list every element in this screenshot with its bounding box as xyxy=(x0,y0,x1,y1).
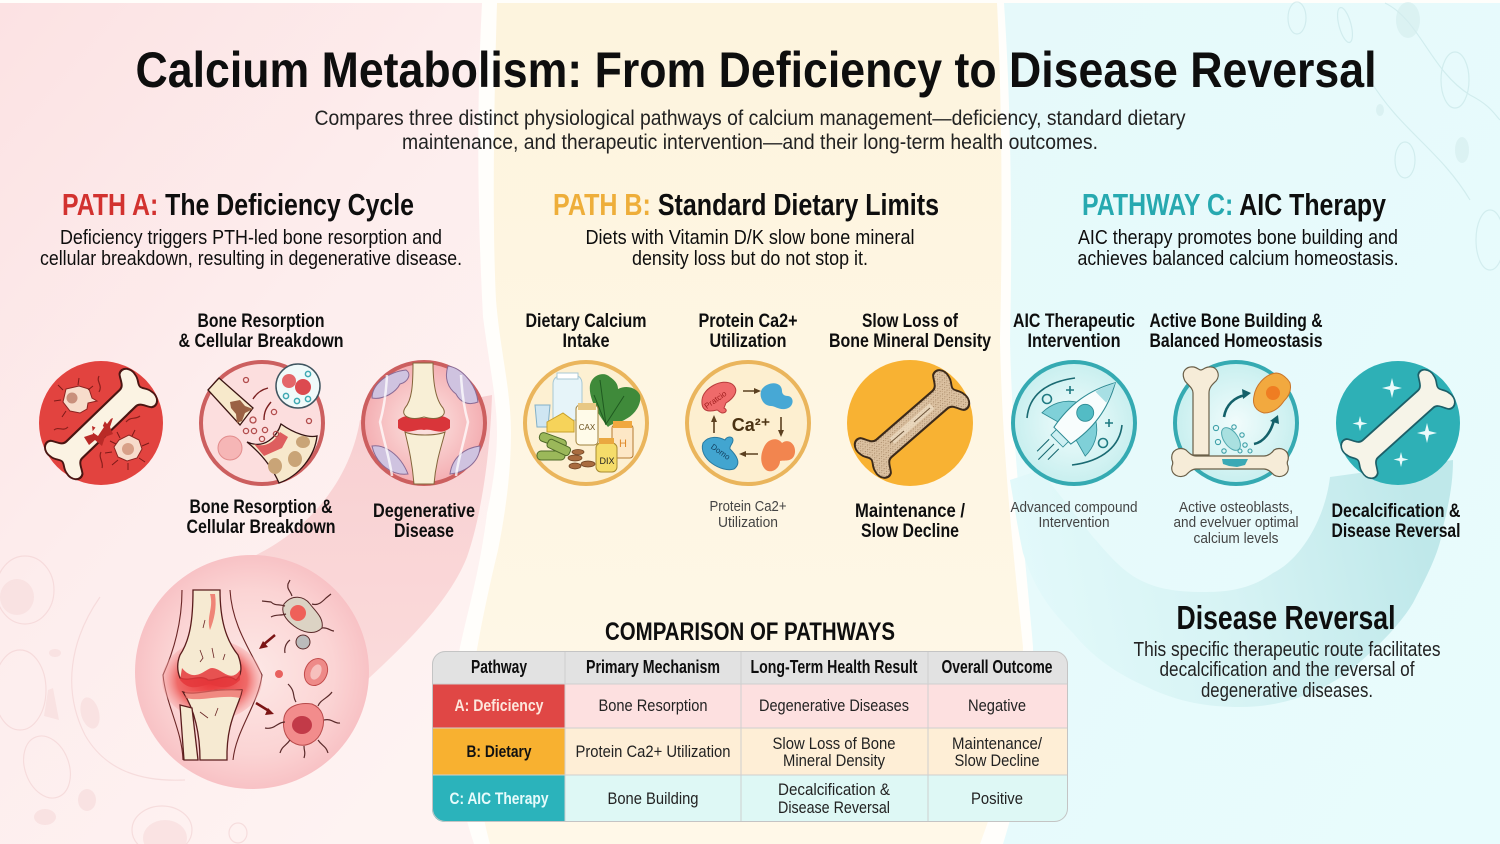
table row C: C: AIC Therapy xyxy=(450,789,549,808)
caption: protein utilization: Protein Ca2+ xyxy=(710,498,787,515)
description: path B: Diets with Vitamin D/K slow bone mineral xyxy=(586,227,914,249)
icon: rocket xyxy=(1013,361,1137,484)
label: active bone building: Balanced Homeostasis xyxy=(1150,330,1323,352)
caption: protein utilization xyxy=(710,498,787,531)
callout: disease reversal: decalcification and the reversal of xyxy=(1160,659,1415,681)
callout: disease reversal xyxy=(1134,599,1440,702)
table header: Long-Term Health Result xyxy=(750,657,918,677)
icon: protein calcium cycle: Pratcio xyxy=(703,389,729,411)
label: dietary calcium intake: Dietary Calcium xyxy=(526,310,646,332)
label: AIC intervention: Intervention xyxy=(1028,330,1120,352)
table row B: B: Dietary xyxy=(466,742,532,761)
label: protein utilization top: Protein Ca2+ xyxy=(698,310,798,332)
icon: bone resorption and cellular breakdown xyxy=(201,362,323,484)
panel: path B xyxy=(525,187,991,542)
icon: dietary calcium foods: H xyxy=(619,438,627,450)
caption: advanced compound xyxy=(1010,499,1138,531)
table row B xyxy=(466,734,1042,770)
label: bone resorption lower: Bone Resorption & xyxy=(190,496,332,518)
label: bone resorption lower xyxy=(186,496,336,538)
label: AIC intervention: AIC Therapeutic xyxy=(1013,310,1135,332)
title: Calcium Metabolism: From Deficiency to Disease Reversal xyxy=(136,42,1376,98)
icon: porous bone xyxy=(847,360,973,486)
table row C: Positive xyxy=(971,789,1023,808)
table row B: Maintenance/ xyxy=(952,734,1042,753)
icon: protein calcium cycle: Domo xyxy=(709,442,732,462)
subtitle: Compares three distinct physiological pathways of calcium management—deficiency, standard dietary xyxy=(314,107,1186,130)
icon: dietary calcium foods: DIX xyxy=(599,456,615,466)
table header: Primary Mechanism xyxy=(586,657,720,677)
subtitle: maintenance, and therapeutic intervention—and their long-term health outcomes. xyxy=(402,131,1098,154)
icon: healthy bone xyxy=(1336,361,1460,485)
caption: advanced compound: Advanced compound xyxy=(1010,499,1138,516)
label: decalcification and reversal: Decalcification & xyxy=(1332,500,1460,522)
label: maintenance slow decline: Maintenance / xyxy=(855,500,965,522)
description: path A: Deficiency triggers PTH-led bone resorption and xyxy=(60,227,442,249)
description: path C: AIC therapy promotes bone building and xyxy=(1078,227,1398,249)
caption: active osteoblasts xyxy=(1174,499,1298,547)
label: maintenance slow decline xyxy=(855,500,965,542)
label: protein utilization top: Utilization xyxy=(710,330,786,352)
description: path B: density loss but do not stop it. xyxy=(632,248,868,270)
table row A: Negative xyxy=(968,696,1026,715)
label: degenerative disease xyxy=(373,500,475,542)
table row A xyxy=(454,696,1026,715)
icon: dietary calcium foods xyxy=(525,362,647,484)
description: path C xyxy=(1078,227,1398,270)
icon: protein calcium cycle: Ca²⁺ xyxy=(732,415,770,435)
comparison table xyxy=(432,651,1068,822)
description: path C: achieves balanced calcium homeostasis. xyxy=(1078,248,1398,270)
panel: path C xyxy=(1010,187,1460,702)
callout: disease reversal: This specific therapeutic route facilitates xyxy=(1134,639,1440,661)
table row C: Decalcification & xyxy=(778,780,891,799)
label: slow loss: Slow Loss of xyxy=(862,310,958,332)
label: dietary calcium intake xyxy=(526,310,646,352)
table row B: Slow Loss of Bone xyxy=(772,734,896,753)
label: slow loss: Bone Mineral Density xyxy=(829,330,991,352)
table row C xyxy=(450,780,1023,817)
table row B: Slow Decline xyxy=(954,751,1040,770)
illustration: inflamed knee and cells xyxy=(135,555,369,789)
caption: active osteoblasts: and evelvuer optimal xyxy=(1174,514,1298,531)
panel: path A xyxy=(39,187,485,789)
swoosh: path C flow band xyxy=(1010,460,1453,707)
heading: path A: PATH A: The Deficiency Cycle xyxy=(62,187,414,222)
caption: protein utilization: Utilization xyxy=(718,514,778,531)
label: bone resorption lower: Cellular Breakdown xyxy=(186,516,336,538)
table row A: Degenerative Diseases xyxy=(759,696,909,715)
caption: active osteoblasts: calcium levels xyxy=(1194,530,1278,547)
caption: advanced compound: Intervention xyxy=(1038,514,1110,531)
subtitle xyxy=(314,107,1186,154)
label: AIC intervention xyxy=(1013,310,1135,352)
icon: dietary calcium foods: CAX xyxy=(579,423,596,432)
label: slow loss xyxy=(829,310,991,352)
table row C: Bone Building xyxy=(608,789,698,808)
icon: degenerative joint xyxy=(363,362,485,484)
label: bone resorption top xyxy=(178,310,344,352)
icon: bone building with osteoblast xyxy=(1172,362,1297,484)
heading: path B: PATH B: Standard Dietary Limits xyxy=(553,187,939,222)
label: bone resorption top: Bone Resorption xyxy=(198,310,324,332)
heading: path C: PATHWAY C: AIC Therapy xyxy=(1082,187,1387,222)
label: maintenance slow decline: Slow Decline xyxy=(861,520,959,542)
heading: comparison of pathways: COMPARISON OF PATHWAYS xyxy=(605,618,895,646)
table header xyxy=(471,657,1052,677)
table header: Overall Outcome xyxy=(942,657,1052,677)
table header: Pathway xyxy=(471,657,527,677)
icon: protein calcium cycle xyxy=(687,362,809,484)
label: bone resorption top: & Cellular Breakdown xyxy=(178,330,344,352)
swoosh: path A flow band xyxy=(250,395,492,720)
label: decalcification and reversal xyxy=(1332,500,1460,542)
label: active bone building: Active Bone Building & xyxy=(1150,310,1322,332)
icon: fractured bone xyxy=(39,361,163,485)
label: degenerative disease: Disease xyxy=(394,520,454,542)
label: degenerative disease: Degenerative xyxy=(373,500,475,522)
description: path B xyxy=(586,227,914,270)
label: active bone building xyxy=(1150,310,1323,352)
description: path A: cellular breakdown, resulting in degenerative disease. xyxy=(40,248,462,270)
description: path A xyxy=(40,227,462,270)
caption: active osteoblasts: Active osteoblasts, xyxy=(1179,499,1293,516)
table row C: Disease Reversal xyxy=(778,798,890,817)
callout: disease reversal: Disease Reversal xyxy=(1176,599,1396,636)
table row B: Protein Ca2+ Utilization xyxy=(576,742,730,761)
table row A: Bone Resorption xyxy=(598,696,708,715)
callout: disease reversal: degenerative diseases. xyxy=(1201,680,1373,702)
label: dietary calcium intake: Intake xyxy=(562,330,610,352)
table row B: Mineral Density xyxy=(783,751,885,770)
label: decalcification and reversal: Disease Reversal xyxy=(1332,520,1460,542)
table row A: A: Deficiency xyxy=(454,696,544,715)
label: protein utilization top xyxy=(698,310,798,352)
